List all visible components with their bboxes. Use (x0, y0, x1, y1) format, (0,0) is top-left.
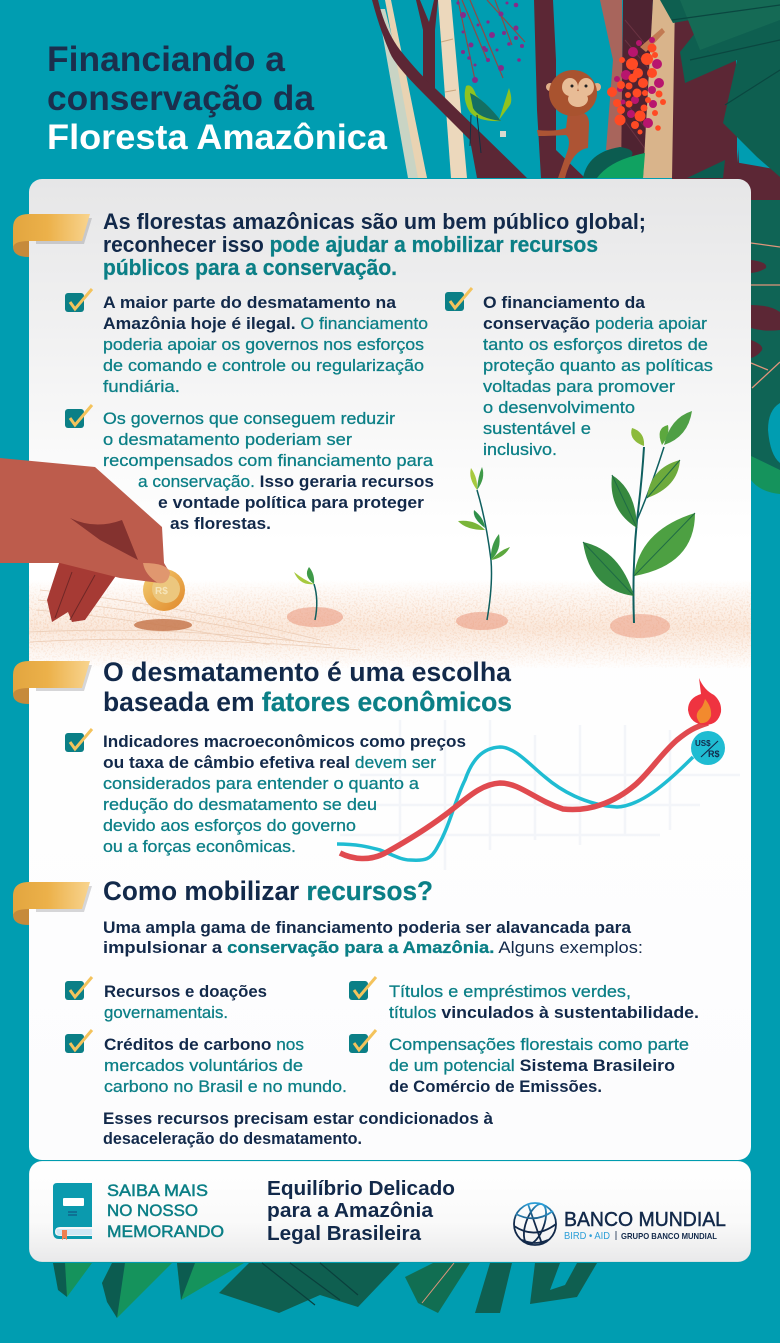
icon: globe (514, 1201, 556, 1247)
text: memo title: Equilíbrio Delicado (267, 1177, 455, 1200)
logo: World Bank: BIRD • AID (564, 1230, 610, 1242)
text: conservation financing: voltadas para promover (483, 377, 675, 396)
text: rewarded governments: o desmatamento poderiam ser (103, 430, 352, 449)
panel: footer card (29, 1161, 751, 1262)
text: forest offsets: de Comércio de Emissões. (389, 1077, 602, 1096)
text: forest offsets: Compensações florestais como parte (389, 1035, 689, 1054)
logo: World Bank: GRUPO BANCO MUNDIAL (621, 1231, 717, 1241)
text: forest offsets: de um potencial Sistema Brasileiro (389, 1056, 675, 1075)
cyan line (337, 747, 693, 860)
title: conservação da (47, 79, 315, 118)
illustration: hand with coin (0, 458, 185, 622)
logo: World Bank (514, 1201, 726, 1247)
coin: R$ (155, 586, 168, 597)
icon: currency badge: R$ (708, 749, 720, 759)
bookmark: section 3 (13, 882, 92, 925)
text: green bonds (389, 982, 699, 1022)
text: carbon credits: Créditos de carbono nos (104, 1035, 304, 1054)
text: memo title: Legal Brasileira (267, 1222, 422, 1245)
big branch (372, 0, 527, 178)
icon: book (53, 1183, 92, 1240)
text: rewarded governments: e vontade política para proteger (158, 493, 424, 512)
icon: currency badge (691, 731, 725, 765)
text: conservation financing: tanto os esforços diretos de (483, 335, 708, 354)
heading: deforestation economic: baseada em fatores econômicos (103, 687, 512, 717)
large maroon trunk (672, 0, 740, 179)
text: conservation financing: o desenvolvimento (483, 398, 635, 417)
icon: check 3 (445, 288, 472, 311)
text: rewarded governments: recompensados com financiamento para (103, 451, 434, 470)
icon: check 1 (65, 289, 92, 312)
text: rewarded governments: a conservação. Isso geraria recursos (138, 472, 434, 491)
bookmark: section 2 (13, 661, 92, 704)
text: illegal deforestation: A maior parte do desmatamento na (103, 293, 397, 312)
icon: currency badge: US$ (695, 739, 711, 748)
purple palm (458, 0, 525, 80)
pale trunk (378, 9, 427, 178)
text: illegal deforestation (103, 293, 428, 396)
illustration: large plant (583, 411, 695, 623)
illustration: right edge leaves (740, 178, 780, 494)
icon: check 8 (349, 1030, 376, 1053)
text: carbon credits: carbono no Brasil e no mundo. (104, 1077, 347, 1096)
text: intro to examples: impulsionar a conservação para a Amazônia. Alguns exemplos: (103, 939, 643, 957)
text: conservation financing: sustentável e (483, 419, 591, 438)
beige trunk (643, 0, 675, 178)
text: memo title: para a Amazônia (267, 1199, 434, 1222)
text: rewarded governments: Os governos que conseguem reduzir (103, 409, 395, 428)
text: green bonds: Títulos e empréstimos verdes, (389, 982, 631, 1001)
text: rewarded governments: as florestas. (170, 514, 271, 533)
text: macroeconomic indicators: redução do desmatamento se deu (103, 795, 377, 814)
heading: how to mobilize: Como mobilizar recursos? (103, 876, 433, 906)
icon: check 4 (65, 729, 92, 752)
illustration: small sprout (294, 567, 317, 620)
birch trunk (438, 0, 467, 178)
illustration: leaves below footer (53, 1263, 597, 1318)
heading: public good: reconhecer isso pode ajudar a mobilizar recursos (103, 232, 598, 257)
tall dark trunk (534, 0, 585, 178)
text: learn more: MEMORANDO (107, 1222, 224, 1241)
monkey (537, 111, 589, 178)
text: illegal deforestation: de comando e controle ou regularização (103, 356, 424, 375)
red line (340, 723, 708, 859)
icon: check 2 (65, 405, 92, 428)
text: conditional resources: Esses recursos precisam estar condicionados à (103, 1110, 494, 1128)
text: learn more: SAIBA MAIS (107, 1181, 208, 1200)
panel: main card (29, 179, 751, 1160)
text: illegal deforestation: fundiária. (103, 377, 180, 396)
text: conservation financing: inclusivo. (483, 440, 557, 459)
line chart: exchange rate and deforestation (337, 678, 740, 870)
heading: deforestation economic (103, 657, 512, 717)
text: grants: Recursos e doações (104, 982, 267, 1001)
text: conservation financing (483, 293, 713, 459)
text: rewarded governments (103, 409, 434, 533)
pink trunk (600, 0, 623, 150)
hatched dark trunk (621, 0, 653, 178)
text: green bonds: títulos vinculados à sustentabilidade. (389, 1003, 699, 1022)
gap behind big leaf (737, 63, 746, 163)
icon: check 7 (349, 977, 376, 1000)
text: conservation financing: O financiamento da (483, 293, 646, 312)
forked tree (416, 0, 438, 90)
text: macroeconomic indicators: ou taxa de câmbio efetiva real devem ser (103, 753, 436, 772)
text: grants: governamentais. (104, 1003, 228, 1022)
text: illegal deforestation: Amazônia hoje é ilegal. O financiamento (103, 314, 428, 333)
text: intro to examples (103, 919, 643, 957)
text: carbon credits: mercados voluntários de (104, 1056, 303, 1075)
text: macroeconomic indicators: Indicadores macroeconômicos como preços (103, 732, 466, 751)
illustration: medium sprout (458, 467, 510, 620)
text: macroeconomic indicators: ou a forças econômicas. (103, 837, 296, 856)
text: illegal deforestation: poderia apoiar os governos nos esforços (103, 335, 424, 354)
green leaves at base (583, 147, 632, 178)
text: carbon credits (104, 1035, 347, 1096)
bookmark: section 1 (13, 214, 92, 257)
icon: flame (688, 678, 721, 725)
text: learn more (107, 1181, 224, 1241)
text: learn more: NO NOSSO (107, 1201, 198, 1220)
red fruit cluster (640, 28, 665, 52)
bird (465, 85, 501, 121)
title: Floresta Amazônica (47, 118, 388, 157)
right maroon (723, 160, 780, 200)
big dark green leaf (660, 0, 780, 177)
coin (143, 569, 185, 611)
text: macroeconomic indicators: devido aos esforços do governo (103, 816, 356, 835)
illustration: soil band (29, 580, 751, 668)
heading: public good: As florestas amazônicas são um bem público global; (103, 209, 646, 234)
illustration: forest canopy (372, 0, 780, 200)
text: grants (104, 982, 267, 1022)
logo: World Bank: BANCO MUNDIAL (564, 1209, 726, 1231)
title: Financiando a (47, 40, 286, 79)
text: macroeconomic indicators (103, 732, 466, 856)
heading: public good (103, 209, 646, 280)
text: intro to examples: Uma ampla gama de financiamento poderia ser alavancada para (103, 919, 632, 937)
text: forest offsets (389, 1035, 689, 1096)
text: conditional resources (103, 1110, 494, 1148)
text: conservation financing: conservação poderia apoiar (483, 314, 707, 333)
icon: check 5 (65, 977, 92, 1000)
title (47, 40, 388, 157)
text: memo title (267, 1177, 455, 1245)
heading: public good: públicos para a conservação. (103, 255, 397, 280)
icon: check 6 (65, 1030, 92, 1053)
text: conditional resources: desaceleração do desmatamento. (103, 1130, 362, 1148)
soil mounds (287, 607, 343, 627)
text: conservation financing: proteção quanto as políticas (483, 356, 713, 375)
heading: deforestation economic: O desmatamento é uma escolha (103, 657, 512, 687)
text: macroeconomic indicators: considerados para entender o quanto a (103, 774, 420, 793)
